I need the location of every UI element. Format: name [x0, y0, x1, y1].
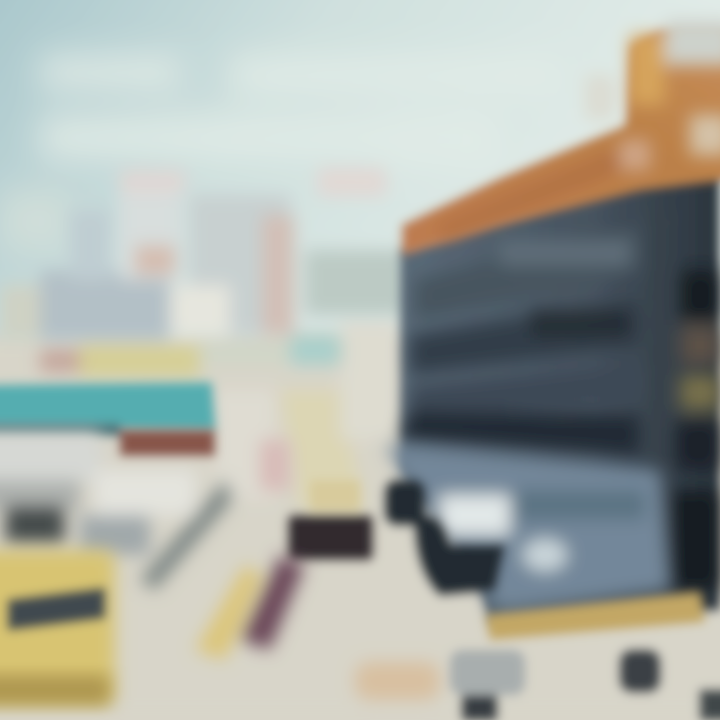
building floors	[400, 210, 720, 590]
building base: glass storefront	[385, 445, 670, 610]
road markings	[195, 440, 440, 700]
pedestrians and street furniture	[450, 650, 720, 720]
sky	[0, 0, 720, 350]
large building: facade	[385, 20, 720, 640]
teal awning	[0, 382, 216, 430]
dark cars at building entrance	[288, 480, 505, 595]
ground: street and pavement	[0, 320, 720, 720]
red awning strip	[0, 424, 215, 456]
white trucks	[0, 432, 232, 590]
truck windshield	[8, 588, 105, 630]
yellow truck	[0, 550, 115, 705]
truck lower shadow	[0, 675, 110, 705]
building: orange roof band	[402, 30, 720, 255]
building: yellow sign strip	[485, 592, 705, 640]
clouds	[0, 55, 560, 250]
distant city buildings	[0, 168, 405, 377]
roof details	[440, 20, 720, 240]
